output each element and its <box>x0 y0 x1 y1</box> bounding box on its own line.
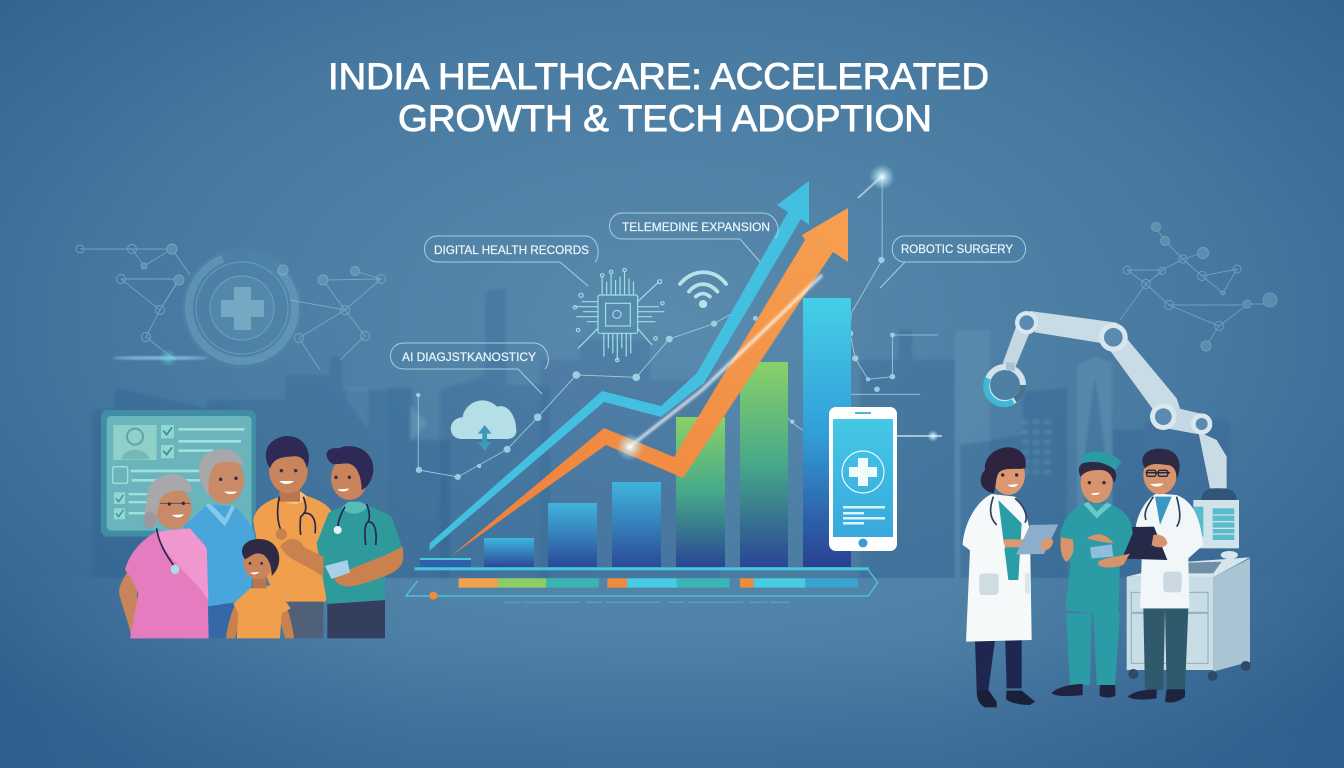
network: right <box>1120 222 1277 351</box>
bar chart <box>420 298 851 567</box>
label: AI diagnostics: AI DIAGJSTKANOSTICY <box>402 350 536 364</box>
flare at network top <box>858 164 895 198</box>
icon: circuit chip <box>573 268 664 362</box>
person: nurse in teal scrubs <box>1052 451 1133 697</box>
label: robotic surgery <box>880 236 1026 288</box>
baseline and timeline strip <box>406 567 878 602</box>
arrow: blue growth line <box>429 181 809 551</box>
bar 1 <box>420 558 471 567</box>
flare near phone <box>897 430 942 442</box>
icon: medical emblem with rings <box>182 248 302 368</box>
bar 6 <box>740 362 788 567</box>
panel: patient record tablet <box>101 410 256 537</box>
label: telemedine expansion: TELEMEDINE EXPANSION <box>622 220 770 234</box>
title line 2: GROWTH & TECH ADOPTION <box>398 98 932 139</box>
floor shade <box>0 640 1344 768</box>
label: telemedine expansion <box>610 213 778 262</box>
person: grandmother in blue <box>183 449 256 638</box>
bar 2 <box>484 538 534 567</box>
light streak <box>616 275 822 461</box>
bar 5 <box>676 417 725 567</box>
label: robotic surgery: ROBOTIC SURGERY <box>901 242 1013 256</box>
label: digital health records: DIGITAL HEALTH RECORDS <box>434 243 589 257</box>
icon: smartphone with medical cross <box>829 407 897 551</box>
label: AI diagnostics <box>390 343 548 394</box>
title line 1: INDIA HEALTHCARE: ACCELERATED <box>328 56 989 97</box>
person: grandmother in pink sari <box>119 474 209 638</box>
person: man in teal <box>280 446 403 638</box>
medical console cart <box>1127 500 1251 681</box>
network: dots behind chart <box>416 180 938 480</box>
bar 7 <box>803 298 851 567</box>
group: family and patients <box>101 410 403 638</box>
city skyline silhouette <box>93 288 1230 578</box>
person: male doctor with tablet <box>1111 449 1203 703</box>
group: medical team and robotic equipment <box>963 311 1251 707</box>
bar 4 <box>612 482 661 567</box>
person: boy <box>226 539 294 638</box>
icon: wifi <box>680 272 726 308</box>
person: female doctor with tablet <box>963 447 1058 707</box>
title <box>328 56 989 139</box>
bar 3 <box>548 503 597 567</box>
lens flare left <box>112 349 208 367</box>
arrow: orange growth line <box>451 208 848 556</box>
person: man in orange <box>253 436 333 638</box>
network: left <box>76 244 386 370</box>
robotic arm <box>986 311 1237 500</box>
icon: cloud with up/down arrows <box>451 400 516 451</box>
label: digital health records <box>424 236 598 286</box>
chart area <box>390 164 1026 602</box>
floor <box>0 578 1344 768</box>
